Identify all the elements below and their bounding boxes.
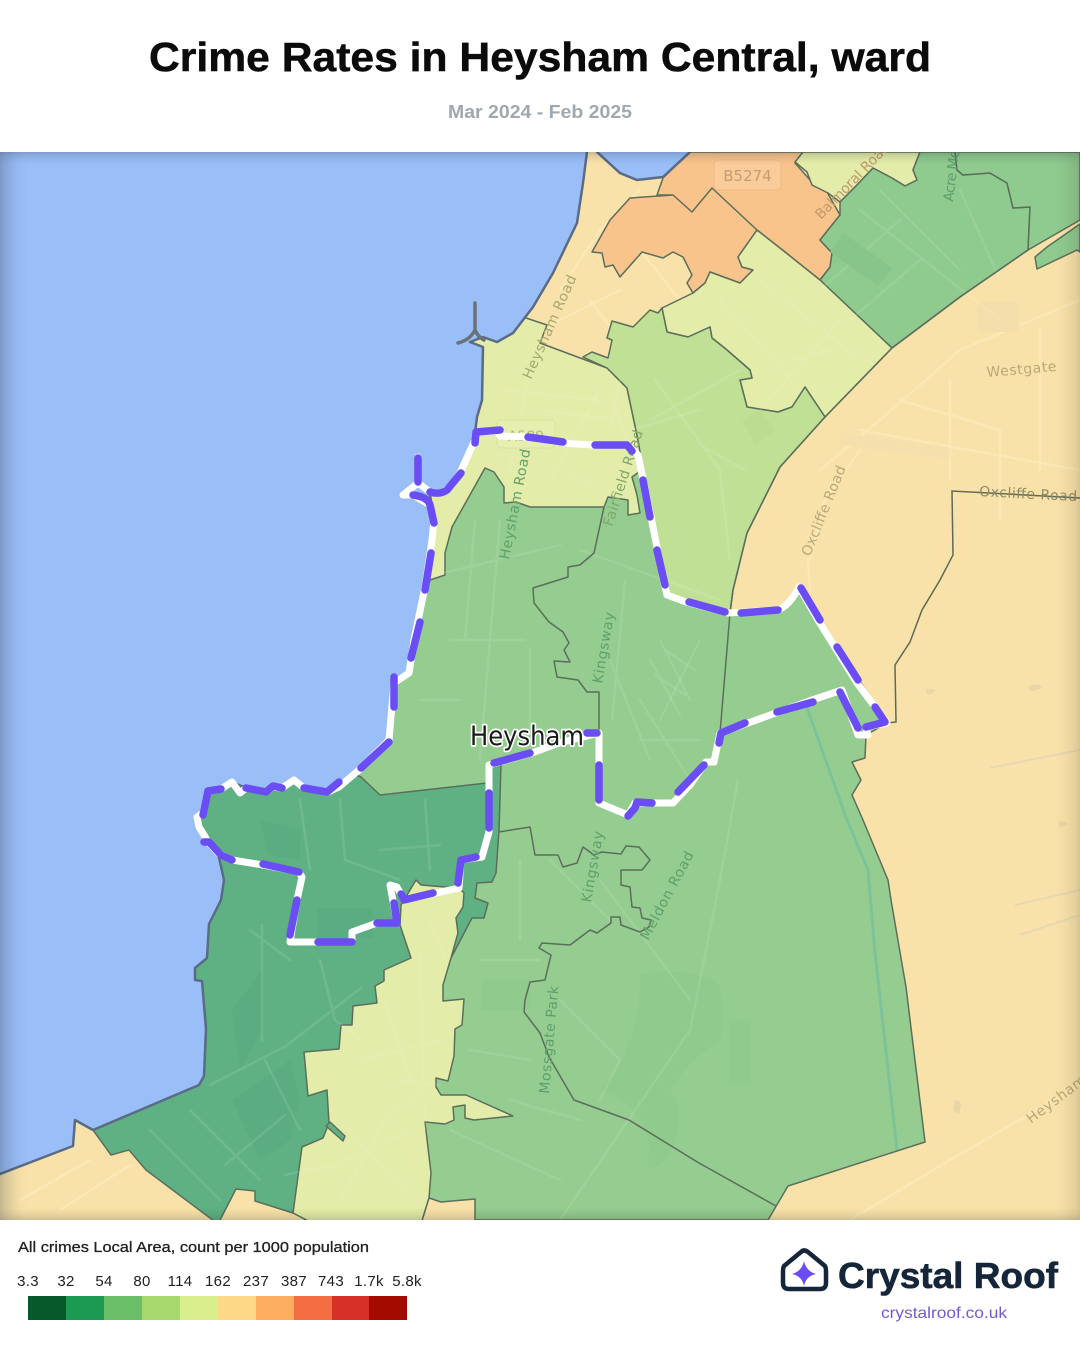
region: pale yellow south [293, 880, 513, 1224]
purple dashes [203, 430, 885, 942]
road labels: Meldon Road [637, 849, 698, 943]
road labels: Heysham Road [497, 448, 534, 561]
legend title: All crimes Local Area, count per 1000 population [18, 1239, 369, 1256]
mid green patches [482, 972, 751, 1168]
internal ward boundary lines [499, 250, 1080, 1206]
road badge B5274: B5274 [723, 167, 772, 185]
region: light green [583, 308, 825, 613]
legend tick labels [17, 1273, 422, 1290]
logo wordmark: Crystal Roof [838, 1255, 1059, 1296]
region: green far north-east [955, 152, 1080, 250]
road labels [497, 101, 1080, 1127]
logo: Crystal Roof [783, 1250, 1059, 1322]
legend tick labels: 387 [281, 1273, 307, 1290]
region: green wedge east [1035, 224, 1080, 269]
road labels: Westgate [986, 359, 1057, 381]
road badge B5274 [714, 160, 781, 190]
region: pale yellow north-east [662, 230, 892, 417]
legend tick labels: 114 [168, 1273, 192, 1290]
legend tick labels: 32 [57, 1273, 75, 1290]
place label: Heysham: Heysham [470, 721, 584, 752]
road labels: Oxcliffe Road [979, 484, 1077, 505]
road badge A589 [497, 420, 555, 448]
region: pale yellow ward north [430, 317, 640, 579]
road labels: Mossgate Park [537, 984, 562, 1094]
bay at top [596, 152, 692, 182]
road badge A589: A589 [508, 429, 544, 445]
legend colour bar [28, 1296, 407, 1320]
icon: house with star [783, 1250, 826, 1289]
road labels: Acre Moss Lane [941, 101, 969, 202]
region: mid green central and east [340, 468, 925, 1220]
legend tick labels: 237 [243, 1273, 269, 1290]
legend tick labels: 743 [318, 1273, 344, 1290]
sea [0, 147, 587, 1176]
region: beige south pocket [422, 1198, 476, 1220]
road labels: Fairfield Road [601, 428, 647, 528]
region: dark green spike [326, 1122, 345, 1141]
water channel [806, 705, 897, 1150]
legend tick labels: 5.8k [392, 1273, 422, 1290]
website link: crystalroof.co.uk [881, 1305, 1008, 1322]
road labels: Kingsway [579, 830, 607, 904]
legend [17, 1239, 422, 1320]
legend tick labels: 3.3 [17, 1273, 39, 1290]
legend tick labels: 80 [133, 1273, 151, 1290]
legend tick labels: 1.7k [354, 1273, 384, 1290]
region: pale yellow Balmoral [795, 152, 920, 202]
road labels: Balmoral Road [812, 140, 893, 223]
subtitle: date range: Mar 2024 - Feb 2025 [448, 102, 632, 122]
road labels: Kingsway [590, 611, 618, 685]
dark green patches [232, 820, 373, 1160]
legend tick labels: 162 [205, 1273, 231, 1290]
road labels: Heysham Road [520, 273, 580, 382]
road labels: Oxcliffe Road [799, 463, 850, 558]
legend tick labels: 54 [95, 1273, 113, 1290]
region: dark green west [60, 765, 501, 1224]
ward boundary: Heysham Central [197, 430, 887, 942]
region: green north-east [820, 152, 1030, 348]
pier [458, 303, 484, 343]
beige area road network [20, 190, 1080, 1220]
white boundary base [197, 431, 887, 942]
region: orange high crime north [592, 152, 840, 293]
title: Crime Rates in Heysham Central, ward [149, 34, 931, 80]
road network [150, 190, 1000, 1220]
